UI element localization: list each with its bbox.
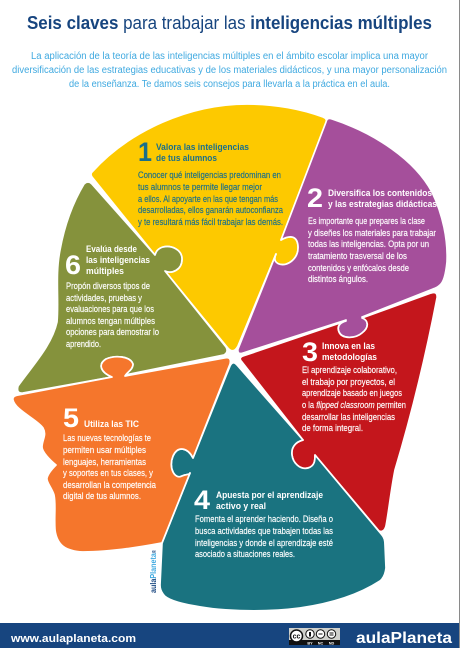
heading 3: Innova en las [322,341,375,352]
body 2: Es importante que prepares la clase [308,216,425,226]
heading 6: Evalúa desde [86,244,137,255]
body 2: y diseñes los materiales para trabajar [308,228,436,238]
number 1: 1 [138,137,152,167]
body 4: inteligencias y donde el aprendizaje esté [195,538,333,548]
body 4: Fomenta el aprender haciendo. Diseña o [195,514,333,524]
body 1: tus alumnos te permite llegar mejor [138,182,262,192]
body 3: o la flipped classroom permiten [302,400,406,410]
intro text: La aplicación de la teoría de las inteligencias múltiples en el ámbito escolar implica una mayor [31,51,429,62]
body 5: permiten usar múltiples [63,445,146,455]
creative commons badge: BY [307,641,313,645]
body 3 [302,365,406,433]
heading 6: múltiples [86,266,124,277]
body 3: El aprendizaje colaborativo, [302,365,397,375]
body 3: aprendizaje basado en juegos [302,388,402,398]
body 6: actividades, pruebas y [66,293,142,303]
heading 6: las inteligencias [86,255,150,266]
heading 1: Valora las inteligencias [156,142,249,153]
number 4: 4 [194,485,210,515]
orange puzzle piece [13,357,230,552]
heading 3 [322,341,377,363]
body 6: aprendido. [66,339,101,349]
panel 5: orange [13,357,230,552]
panel 4: teal [160,363,386,611]
heading 1 [156,142,249,164]
body 6: alumnos tengan múltiples [66,316,155,326]
body 1: a ellos. Al apoyarte en las que tengan más [138,194,278,204]
body 4: asociado a situaciones reales. [195,549,295,559]
intro text [12,51,447,90]
heading 4: activo y real [216,501,266,512]
body 2: distintos ángulos. [308,274,368,284]
body 6 [66,281,159,349]
heading 3: metodologías [322,352,377,363]
creative commons badge: ND [329,641,334,645]
body 6: Propón diversos tipos de [66,281,150,291]
body 2 [308,216,436,284]
panel 2: purple [238,118,447,354]
body 3: desarrollar las inteligencias [302,412,395,422]
heading 4 [216,490,323,512]
creative commons badge [289,628,340,645]
body 5 [63,433,157,501]
body 5: lenguajes, herramientas [63,457,146,467]
heading 1: de tus alumnos [156,153,217,164]
teal puzzle piece [160,363,386,611]
heading 2: y las estrategias didácticas [328,199,437,210]
footer bar [0,623,460,648]
body 4 [195,514,333,559]
number 3: 3 [302,337,318,367]
body 4: busca actividades que trabajen todas las [195,526,333,536]
body 2: contenidos y enfócalos desde [308,263,409,273]
body 5: Las nuevas tecnologías te [63,433,151,443]
number 6: 6 [65,250,81,280]
body 2: tratamiento trasversal de los [308,251,407,261]
body 5: digital de tus alumnos. [63,491,141,501]
body 1: y te resultará más fácil trabajar las demás. [138,217,283,227]
heading 6 [86,244,150,277]
olive puzzle piece [18,182,227,393]
panel 3: red [240,293,437,531]
title: Seis claves para trabajar las inteligencias múltiples [27,13,432,33]
intro text: diversificación de las estrategias educativas y de los materiales didácticos, y una mayor personalización [12,65,447,76]
purple puzzle piece [238,118,447,354]
yellow puzzle piece [91,104,327,351]
body 5: desarrollan la competencia [63,480,157,490]
creative commons badge: cc [293,634,300,640]
panel 6: olive [18,182,227,393]
body 2: todas las inteligencias. Opta por un [308,239,429,249]
footer url: www.aulaplaneta.com [10,633,136,645]
body 3: el trabajo por proyectos, el [302,377,395,387]
heading 2 [328,188,437,210]
panel 1: yellow [91,104,327,351]
body 1: desarrolladas, ellos ganarán autoconfianza [138,205,284,215]
body 5: y soportes en tus clases, y [63,468,153,478]
footer logo: aulaPlaneta [356,630,452,647]
vertical aulaPlaneta logo: aulaPlaneta® [148,550,158,593]
intro text: de la enseñanza. Te damos seis consejos para llevarla a la práctica en el aula. [69,79,390,90]
body 3: de forma integral. [302,423,363,433]
heading 4: Apuesta por el aprendizaje [216,490,323,501]
heading 5: Utiliza las TIC [84,419,139,430]
body 1 [138,170,284,227]
body 1: Conocer qué inteligencias predominan en [138,170,281,180]
number 5: 5 [63,403,79,433]
heading 2: Diversifica los contenidos [328,188,432,199]
body 6: evaluaciones para que los [66,304,154,314]
number 2: 2 [307,183,323,213]
red puzzle piece [240,293,437,531]
body 6: opciones para demostrar lo [66,327,159,337]
creative commons badge: NC [318,641,323,645]
